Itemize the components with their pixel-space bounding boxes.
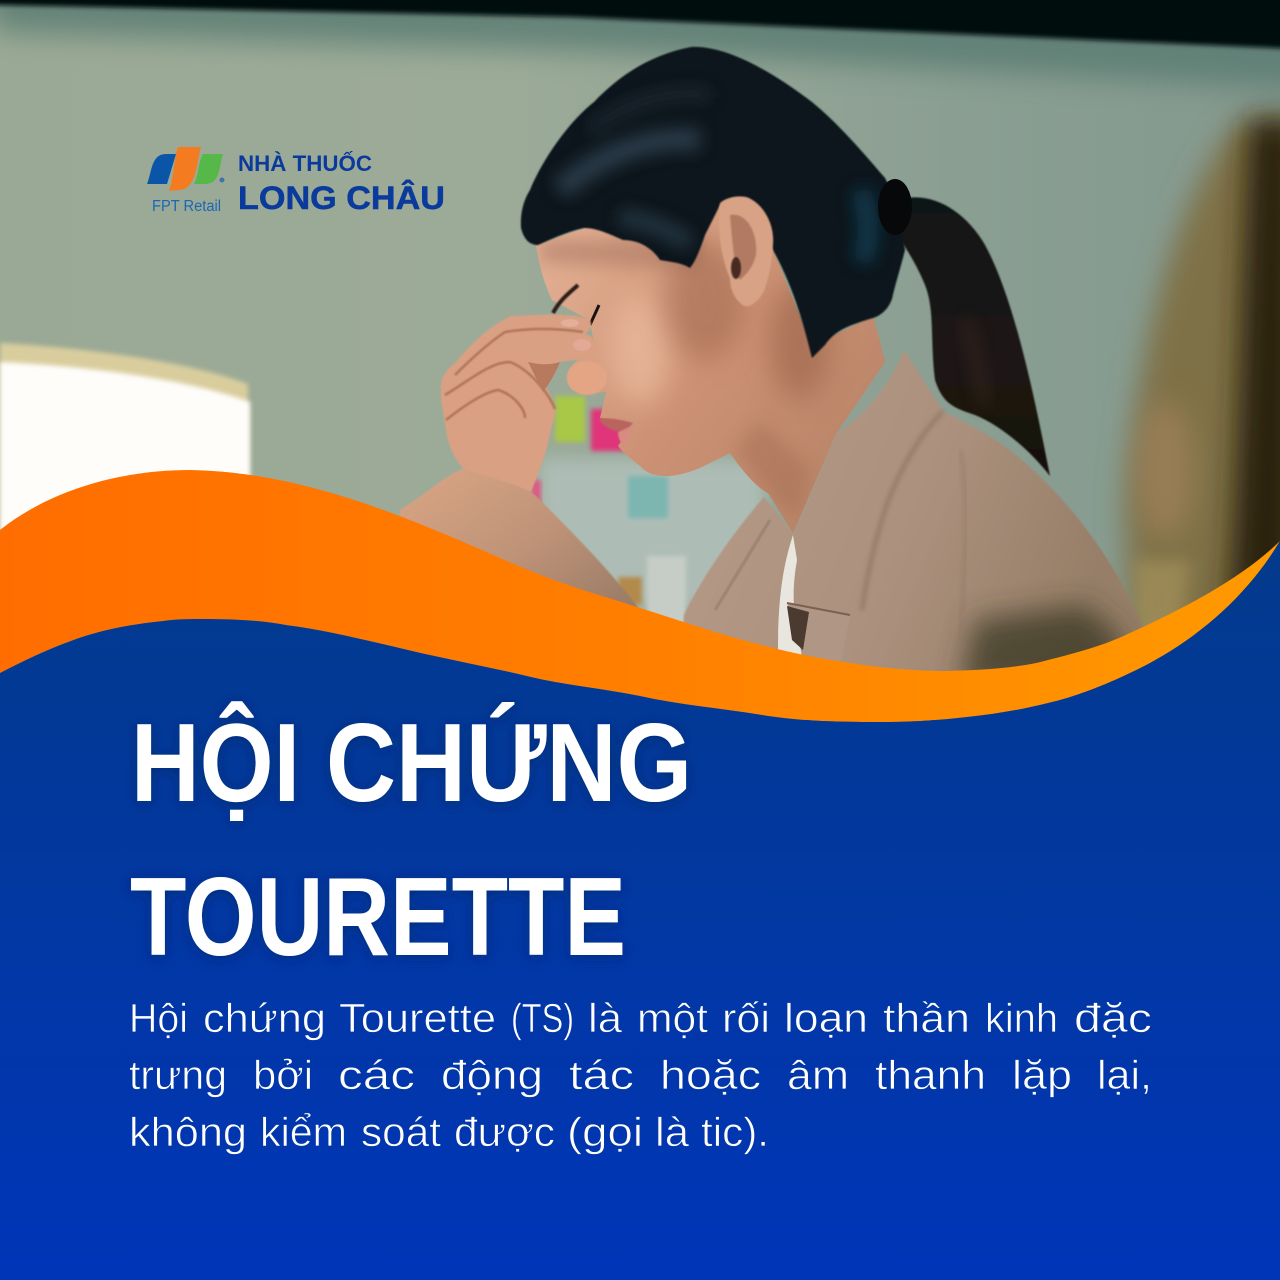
line 1: Hội: [129, 995, 188, 1041]
line 2: thanh: [875, 1052, 986, 1098]
photo: woman holding nose bridge: [400, 47, 1145, 690]
line 2: lại,: [1097, 1052, 1152, 1098]
line 3: là: [655, 1109, 689, 1155]
line 1: (TS): [511, 995, 574, 1041]
white inner shirt: [778, 535, 802, 656]
line 2: các: [338, 1052, 415, 1098]
lamp shade: [0, 343, 250, 540]
logo icon: FPT stripes: [147, 147, 224, 191]
logo: Nhà thuốc Long Châu: [147, 147, 445, 216]
hair tie: [878, 179, 912, 235]
line 2: lặp: [1012, 1052, 1072, 1098]
line 1: là: [588, 995, 622, 1041]
line 1: một: [637, 995, 709, 1041]
title: [130, 701, 692, 979]
line 3: tic).: [701, 1109, 769, 1155]
title line 1: HỘI: [131, 701, 300, 825]
photo background: blurred office wall: [0, 0, 1280, 720]
face and neck: [536, 200, 885, 533]
nose: [567, 361, 607, 395]
ponytail: [895, 197, 1050, 476]
lips: [599, 418, 633, 431]
line 1: Tourette: [339, 995, 496, 1041]
line 1: rối: [722, 995, 770, 1041]
title line 1: [131, 701, 692, 825]
line 1: chứng: [203, 995, 326, 1041]
shirt folds and shadow: [715, 411, 1125, 690]
line 1: kinh: [985, 995, 1058, 1041]
brow: [553, 285, 578, 313]
line 2: trưng: [129, 1052, 227, 1098]
line 2: bởi: [253, 1052, 313, 1098]
line 3: soát: [361, 1109, 442, 1155]
line 2: động: [441, 1052, 543, 1098]
orange wave band: [0, 470, 1280, 722]
closed eye: [590, 305, 599, 325]
shirt: [680, 350, 1145, 690]
line 1: loạn: [784, 995, 868, 1041]
line 3: (gọi: [567, 1109, 643, 1155]
ear: [719, 196, 773, 306]
line 1: thần: [883, 995, 970, 1041]
line 3: không: [129, 1109, 247, 1155]
logo name top: NHÀ THUỐC: [238, 150, 372, 176]
line 2: hoặc: [660, 1052, 761, 1098]
forearm and sleeve: [400, 468, 640, 640]
title line 2: TOURETTE: [130, 855, 626, 979]
logo caption: FPT Retail: [152, 198, 221, 215]
logo name bottom: LONG CHÂU: [238, 180, 445, 216]
line 3: được: [454, 1109, 555, 1155]
blue lower panel: [0, 541, 1280, 1280]
hair: [521, 47, 905, 358]
title line 1: CHỨNG: [326, 701, 692, 825]
line 3: kiểm: [260, 1109, 347, 1155]
pocket: [787, 603, 850, 668]
hair highlights: [560, 94, 868, 262]
hand: [441, 315, 597, 492]
line 2: âm: [787, 1052, 849, 1098]
description paragraph: [129, 995, 1152, 1155]
line 2: tác: [569, 1052, 634, 1098]
line 1: đặc: [1074, 995, 1152, 1041]
